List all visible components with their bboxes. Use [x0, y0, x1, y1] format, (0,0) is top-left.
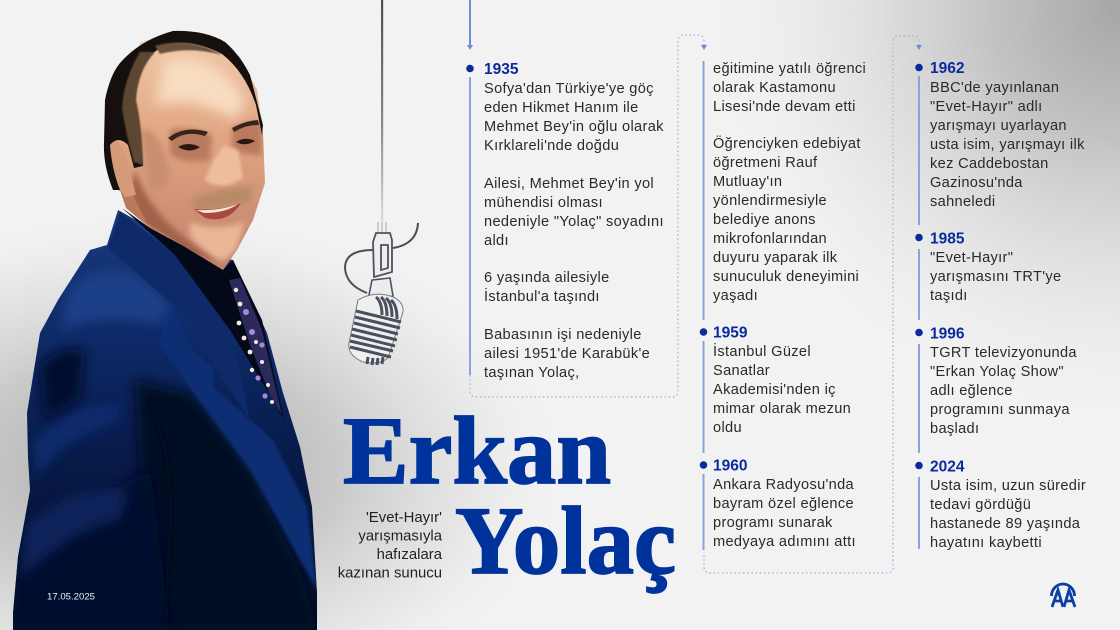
column 3: 1962, 1985, 1996, 2024: yarışmayı uyarlayan	[930, 118, 1067, 134]
column 2: continued, 1959, 1960: oldu	[713, 420, 742, 436]
column 2: continued, 1959, 1960: belediye anons	[713, 212, 816, 228]
column 2: continued, 1959, 1960: olarak Kastamonu	[713, 80, 836, 96]
suit jacket	[13, 210, 317, 630]
eyebrows	[168, 130, 208, 141]
column 3: 1962, 1985, 1996, 2024: 2024	[930, 458, 965, 476]
column 3: 1962, 1985, 1996, 2024: hayatını kaybetti	[930, 535, 1042, 551]
subtitle: kazınan sunucu	[338, 566, 442, 582]
column 2: continued, 1959, 1960: sunuculuk deneyimini	[713, 269, 859, 285]
column 2: continued, 1959, 1960: Akademisi'nden iç	[713, 382, 836, 398]
column 3: 1962, 1985, 1996, 2024: hastanede 89 yaşında	[930, 516, 1081, 532]
title: Erkan Yolaç: Erkan	[343, 397, 611, 504]
column 2: continued, 1959, 1960	[700, 61, 866, 550]
column 3: 1962, 1985, 1996, 2024: yarışmasını TRT'ye	[930, 269, 1061, 285]
column 3: 1962, 1985, 1996, 2024: programını sunmaya	[930, 402, 1070, 418]
subtitle: 'Evet-Hayır'	[366, 510, 442, 526]
head and face	[104, 31, 265, 270]
column 1: 1935: Ailesi, Mehmet Bey'in yol	[484, 176, 654, 192]
nose	[205, 145, 243, 186]
column 1: 1935	[466, 61, 664, 381]
column 2: continued, 1959, 1960: yönlendirmesiyle	[713, 193, 827, 209]
column 3: 1962, 1985, 1996, 2024: kez Caddebostan	[930, 156, 1049, 172]
column 3: 1962, 1985, 1996, 2024: adlı eğlence	[930, 383, 1013, 399]
column 2: continued, 1959, 1960: bayram özel eğlence	[713, 496, 854, 512]
column 1: 1935: nedeniyle "Yolaç" soyadını	[484, 214, 664, 230]
column 1: 1935: İstanbul'a taşındı	[484, 287, 600, 305]
column 3: 1962, 1985, 1996, 2024: 1962	[930, 60, 964, 77]
column 1: 1935: taşınan Yolaç,	[484, 365, 580, 381]
column 1: 1935: 1935	[484, 61, 519, 78]
column 3: 1962, 1985, 1996, 2024: tedavi gördüğü	[930, 497, 1031, 513]
column 2: continued, 1959, 1960: programı sunarak	[713, 515, 833, 531]
column 2: continued, 1959, 1960: mikrofonlarından	[713, 231, 827, 247]
column 3: 1962, 1985, 1996, 2024: "Erkan Yolaç Show"	[930, 364, 1064, 380]
shirt collar and tie	[122, 208, 284, 420]
column 2: continued, 1959, 1960: Sanatlar	[713, 363, 770, 379]
column 1: 1935: aldı	[484, 233, 509, 249]
grille	[350, 297, 401, 365]
holder	[378, 222, 386, 232]
column 2: continued, 1959, 1960: İstanbul Güzel	[713, 342, 811, 360]
column 3: 1962, 1985, 1996, 2024: "Evet-Hayır"	[930, 250, 1013, 266]
cable	[345, 223, 418, 293]
column 3: 1962, 1985, 1996, 2024: taşıdı	[930, 288, 968, 304]
column 1: 1935: Mehmet Bey'in oğlu olarak	[484, 119, 664, 135]
title: Erkan Yolaç: Yolaç	[455, 487, 676, 594]
microphone illustration	[345, 0, 418, 365]
column 2: continued, 1959, 1960: 1960	[713, 458, 747, 474]
column 3: 1962, 1985, 1996, 2024: sahneledi	[930, 194, 995, 210]
Anadolu Agency logo	[1052, 584, 1075, 607]
column 2: continued, 1959, 1960: öğretmeni Rauf	[713, 155, 818, 171]
column 1: 1935: ailesi 1951'de Karabük'e	[484, 346, 650, 362]
date: 17.05.2025	[47, 592, 95, 602]
column 2: continued, 1959, 1960: duyuru yaparak ilk	[713, 250, 838, 266]
column 1: 1935: eden Hikmet Hanım ile	[484, 100, 639, 116]
column 3: 1962, 1985, 1996, 2024: 1996	[930, 326, 965, 342]
column 2: continued, 1959, 1960: yaşadı	[713, 288, 758, 304]
subtitle: yarışmasıyla	[358, 528, 443, 544]
hanging wire	[381, 0, 383, 222]
column 2: continued, 1959, 1960: Lisesi'nde devam etti	[713, 99, 856, 115]
column 3: 1962, 1985, 1996, 2024: 1985	[930, 230, 965, 248]
subtitle: hafızalara	[377, 547, 443, 563]
column 1: 1935: 6 yaşında ailesiyle	[484, 270, 610, 286]
neck	[120, 190, 235, 268]
column 2: continued, 1959, 1960: medyaya adımını attı	[713, 534, 856, 550]
mouth	[194, 203, 241, 219]
ear	[110, 141, 136, 197]
column 2: continued, 1959, 1960: 1959	[713, 324, 748, 342]
title: Erkan Yolaç	[343, 397, 676, 594]
column 3: 1962, 1985, 1996, 2024: TGRT televizyonunda	[930, 345, 1077, 361]
column 1: 1935: Kırklareli'nde doğdu	[484, 138, 619, 154]
column 3: 1962, 1985, 1996, 2024: BBC'de yayınlanan	[930, 80, 1059, 96]
column 1: 1935: Sofya'dan Türkiye'ye göç	[484, 81, 654, 97]
column 2: continued, 1959, 1960: Öğrenciyken edebiyat	[713, 134, 861, 152]
column 3: 1962, 1985, 1996, 2024: "Evet-Hayır" adlı	[930, 99, 1042, 115]
column 2: continued, 1959, 1960: Ankara Radyosu'nda	[713, 477, 855, 493]
hair	[104, 31, 263, 190]
column 1: 1935: mühendisi olması	[484, 195, 603, 211]
timeline connectors	[467, 0, 922, 573]
column 3: 1962, 1985, 1996, 2024: başladı	[930, 421, 979, 437]
portrait photo of Erkan Yolaç	[13, 31, 317, 630]
column 3: 1962, 1985, 1996, 2024: usta isim, yarışmayı ilk	[930, 137, 1085, 153]
microphone capsule	[349, 294, 403, 363]
column 1: 1935: Babasının işi nedeniyle	[484, 327, 642, 343]
column 2: continued, 1959, 1960: mimar olarak mezun	[713, 401, 851, 417]
column 2: continued, 1959, 1960: Mutluay'ın	[713, 174, 782, 190]
column 2: continued, 1959, 1960: eğitimine yatılı öğrenci	[713, 61, 866, 77]
column 3: 1962, 1985, 1996, 2024	[915, 60, 1086, 551]
column 3: 1962, 1985, 1996, 2024: Usta isim, uzun süredir	[930, 478, 1086, 494]
eyes	[178, 144, 200, 150]
column 3: 1962, 1985, 1996, 2024: Gazinosu'nda	[930, 175, 1023, 191]
